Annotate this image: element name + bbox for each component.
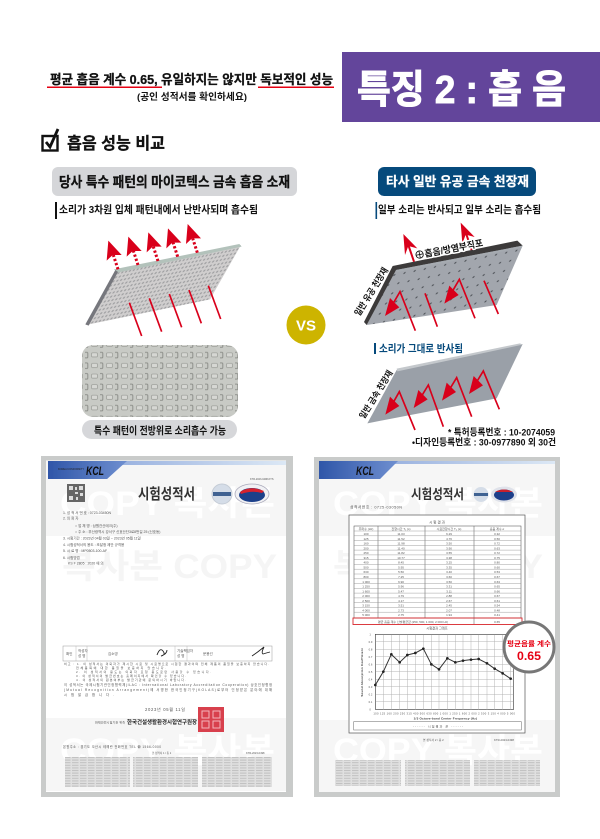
results table: 11.82: [397, 551, 405, 555]
results table: 4.17: [398, 599, 404, 603]
caption: competitor: 일부 소리는 반사되고 일부 소리는 흡수됨: [378, 203, 541, 216]
results table: [349, 515, 525, 733]
results table: 3.35: [446, 566, 452, 570]
results table: 4 000: [362, 608, 370, 612]
date and issuer: [95, 706, 197, 726]
heading pill: competitor: 타사 일반 유공 금속 천장재: [386, 174, 529, 189]
results table: 3.60: [446, 575, 452, 579]
results table: 시 험 결 과: [429, 520, 446, 524]
results table: 10.77: [397, 556, 405, 560]
results table: 200: [363, 546, 369, 550]
KCL header: KOREA CONFORMITY: [58, 468, 84, 471]
results table: 5 000: [362, 613, 370, 617]
footer strips: 본 성적서 2 / 총 2: [423, 738, 444, 742]
illustration: perforated plate: [352, 223, 523, 331]
KCL header: [319, 461, 555, 479]
KCL header: KCL: [86, 464, 104, 478]
signature table: 성 명: [78, 653, 85, 658]
results table: 1 600: [362, 589, 370, 593]
results table: 0.61: [494, 599, 500, 603]
results table: 3.11: [446, 589, 452, 593]
panel: competing perforated metal ceiling: [352, 167, 556, 448]
report number: 성적서번호 : 0725-03050N: [350, 504, 402, 510]
heading pill: our material: 당사 특수 패턴의 마이코텍스 금속 흡음 소재: [59, 174, 290, 190]
heading pill: competitor: [378, 167, 536, 196]
certificate title: 시험성적서: [138, 486, 195, 503]
results table: 6.29: [446, 532, 452, 536]
signature table: 김소영: [108, 651, 118, 656]
results table: 0.65: [494, 584, 500, 588]
accreditation logos: [212, 484, 269, 504]
dotted red arrows: escaping sound: [107, 224, 201, 269]
results table: 흡음 계수 α: [490, 526, 504, 531]
footer strips: [63, 744, 272, 787]
results table: 11.52: [397, 537, 405, 541]
results table: 3.50: [446, 580, 452, 584]
results table: 5.95: [398, 566, 404, 570]
notes: 이 성적서는 국제시험기관인정협력체(ILAC : International Laboratory Accreditation Cooperation) 상호인정협정: [64, 682, 272, 687]
certificate page 1: KTR-2023-0498-KTS: [250, 478, 274, 481]
signature table: [63, 646, 272, 661]
highlighted mean row: [353, 618, 522, 624]
VS badge: [286, 306, 326, 344]
watermark text: COPY 복사본: [60, 732, 275, 770]
results table: 5.50: [398, 570, 404, 574]
certificate details: ○ 업 체 명 : 삼원건산테크(주): [75, 523, 117, 528]
results table: 3.50: [446, 542, 452, 546]
watermark text: COPY 복사본: [60, 485, 275, 523]
caption: our material: 소리가 3차원 입체 패턴내에서 난반사되며 흡수됨: [59, 203, 258, 216]
certificate page 2: [314, 457, 560, 797]
highlighted mean row: 0.65: [494, 620, 500, 624]
rotated label: general perforated ceiling: 일반 유공 천장재: [352, 265, 390, 318]
red seal: [198, 707, 224, 732]
results table: 0.54: [494, 604, 500, 608]
QR code: [67, 484, 85, 502]
results table: 0.63: [494, 546, 500, 550]
banner: feature 2 sound absorption: [342, 52, 600, 122]
absorption line chart: 0.3: [369, 685, 373, 689]
results table: 시료잔향시간 T₂ (s): [437, 526, 461, 531]
results table: 3.40: [446, 570, 452, 574]
certificate details: 1. 성 적 서 번 호 : 0723-03450N: [63, 510, 111, 515]
results table: 7.25: [398, 575, 404, 579]
notes: 3. 이 성적서의 발급번호는 홈페이지에서 확인할 수 있습니다.: [76, 673, 186, 678]
certificate details: 5. 시 료 명 : MP0503-100-AF: [63, 548, 107, 553]
results table: 4.79: [398, 594, 404, 598]
notes: 비고 : 1. 이 성적서는 의뢰자가 제시한 시료 및 시료명으로 시험한 결과이며 전체 제품의 품질을 보증하지 않습니다.: [64, 661, 269, 666]
results table: 0.32: [494, 532, 500, 536]
accreditation logos: [474, 486, 517, 502]
results table: 3.90: [446, 546, 452, 550]
red arrows: fully reflected sound: [385, 371, 499, 430]
red arrows: sound passing through: [403, 223, 475, 262]
date and issuer: 한국건설생활환경시험연구원장: [127, 718, 197, 726]
results table: 3.31: [446, 584, 452, 588]
banner: feature 2 sound absorption: 특징 2 : 흡 음: [357, 69, 566, 112]
results table: 1 000: [362, 580, 370, 584]
watermark text: 복사본 COPY: [62, 548, 277, 586]
results table: 0.67: [494, 594, 500, 598]
results table: 11.98: [397, 542, 405, 546]
notes: 4. 이 성적서의 원본여부는 발급기관에 문의하시기 바랍니다.: [76, 677, 186, 682]
absorption line chart: 100 125 160 200 250 315 400 500 630 800 1 000 1 250 1 600 2 000 2 500 3 150 4 000 5 000: [373, 711, 516, 715]
red lines: incoming sound: [129, 286, 221, 336]
results table: 2.67: [446, 599, 452, 603]
certificate details: 6. 시험방법: [63, 555, 80, 560]
notes: (Mutual Recognition Arrangement)에 서명한 한국인정기구(KOLAS)로부터 인정받은 분야에 대해: [64, 687, 272, 692]
icon: checkbox: [42, 129, 58, 150]
results table: 3.51: [398, 604, 404, 608]
caption: reflected as-is: 소리가 그대로 반사됨: [379, 342, 463, 355]
results table: 11.03: [397, 532, 405, 536]
results table: 6.90: [398, 580, 404, 584]
certificate details: 3. 시험기간 : 2023년 04월 03일 ~ 2023년 05월 11일: [63, 536, 141, 540]
results table: 315: [363, 556, 369, 560]
results table: 160: [363, 542, 369, 546]
absorption line chart: 0.6: [369, 663, 373, 667]
absorption line chart: 1: [369, 633, 371, 637]
headline with red underlines: 평균 흡음 계수 0.65, 유일하지는 않지만 독보적인 성능: [50, 72, 333, 87]
watermark text: COPY 복사본: [333, 485, 543, 523]
results table: 2.73: [398, 608, 404, 612]
VS badge: VS: [296, 318, 316, 334]
callout: mean absorption coefficient 0.65: 평균음률 계수: [507, 639, 552, 648]
results table: 0.50: [494, 537, 500, 541]
panel: our micro-tex metal absorption material: [52, 167, 297, 439]
results table: 3.38: [446, 556, 452, 560]
KCL header: [48, 461, 286, 479]
results table: 2 500: [362, 599, 370, 603]
label: absorbing nonwoven: 흡음/방염부직포: [424, 237, 484, 259]
results table: 2 000: [362, 594, 370, 598]
certificate details: ○ 주 소 : 부산광역시 강서구 신호산단3로8번길 25 (신호동): [75, 529, 160, 534]
date and issuer: 2023년 05월 11일: [145, 706, 185, 713]
results table: 2.45: [446, 604, 452, 608]
results table: 0.72: [494, 551, 500, 555]
footer strips: 본 성적서 1 / 총 1: [152, 751, 172, 755]
results table: 3 150: [362, 604, 370, 608]
results table: 4.76: [446, 537, 452, 541]
results table: 11.40: [397, 546, 405, 550]
absorption line chart: 0.8: [369, 648, 373, 652]
absorption line chart: 0.4: [369, 678, 373, 682]
signature table: 작성자: [78, 648, 88, 653]
illustration: textured plate with absorbed sound: [85, 224, 242, 336]
absorption line chart: 0.2: [369, 693, 373, 697]
results table: 0.66: [494, 589, 500, 593]
callout: mean absorption coefficient 0.65: 0.65: [517, 649, 541, 663]
results table: 시험결과 그래프: [426, 626, 448, 630]
absorption line chart: 0.7: [369, 655, 373, 659]
results table: 3.25: [446, 561, 452, 565]
results table: 0.63: [494, 580, 500, 584]
certificate details: KS F 2805 : 2020 에 의: [68, 560, 104, 566]
caption pill: pattern: [82, 420, 237, 439]
results table: 0.53: [494, 570, 500, 574]
results table: 125: [363, 537, 369, 541]
notes: [64, 661, 272, 697]
notes: 시험발급합니다.: [64, 692, 114, 697]
caption pill: pattern: 특수 패턴이 전방위로 소리흡수 가능: [94, 424, 226, 437]
results table: 0.48: [494, 608, 500, 612]
results table: 250: [363, 551, 369, 555]
section heading with checkbox icon: 흡음 성능 비교: [67, 134, 165, 153]
results table: 0.75: [494, 556, 500, 560]
certificate details: 4. 시험성적서의 용도 : 조달청 제안 규격용: [63, 542, 125, 547]
footer strips: [335, 738, 540, 786]
absorption line chart: Sound Absorption Coefficient: [360, 648, 364, 697]
KCL header: KCL: [356, 464, 374, 478]
results table: 100: [363, 532, 369, 536]
footer strips: 본원주소 : 경기도 오산시 테헤란 전화번호 TEL ☎ 1566-0000: [63, 744, 161, 749]
footer strips: KTR-2023-0498: [494, 738, 514, 742]
absorption line chart: 0.5: [369, 670, 373, 674]
rotated label: general metal ceiling: 일반 금속 천장재: [356, 368, 395, 420]
certificate page 1: [41, 456, 293, 797]
watermark text: [333, 485, 543, 770]
results table: 2.88: [446, 594, 452, 598]
watermark text: COPY 복사본: [333, 732, 543, 770]
pattern close-up photo: [82, 345, 238, 417]
results table: 0.67: [494, 575, 500, 579]
footer strips: KTR-2023-0498: [246, 751, 265, 755]
watermark text: [60, 485, 277, 770]
absorption line chart: 1/3 Octave-band Center Frequency (Hz): [414, 716, 477, 720]
results table: 8.45: [398, 561, 404, 565]
watermark text: 복사본 COPY: [333, 548, 543, 586]
callout: mean absorption coefficient 0.65: [504, 622, 554, 672]
section heading with checkbox icon: [42, 129, 165, 153]
results table: 잔향시간 T₁ (s): [391, 526, 411, 531]
results table: 주파수 (Hz): [359, 526, 373, 531]
results table: 0.80: [494, 561, 500, 565]
certificate details: [63, 510, 160, 566]
signature table: 기술책임자: [177, 648, 194, 653]
results table: 0.41: [494, 613, 500, 617]
results table: 0.60: [494, 566, 500, 570]
results table: 2.07: [446, 608, 452, 612]
notes: 2. 이 성적서의 용도는 의뢰자 요청 용도로만 사용할 수 있습니다.: [76, 669, 211, 674]
patent numbers: [412, 426, 556, 448]
date and issuer: 화재안전시험기관 위촉: [95, 720, 125, 724]
results table: 5.96: [398, 584, 404, 588]
results table: 0.72: [494, 542, 500, 546]
illustration: plain metal plate: [356, 343, 523, 430]
patent numbers: •디자인등록번호 : 30-0977890 외 30건: [412, 436, 556, 448]
results table: 1 250: [362, 584, 370, 588]
red arrows: reflected sound: [385, 279, 498, 331]
signature table: 확인: [66, 651, 72, 656]
absorption line chart: 0.1: [369, 700, 373, 704]
results table: 3.55: [446, 551, 452, 555]
results table: 5.47: [398, 589, 404, 593]
heading pill: our material: [52, 167, 297, 196]
patent numbers: * 특허등록번호 : 10-2074059: [448, 426, 555, 438]
notes: 전체품목에 대한 품질을 보증하지 않습니다.: [76, 665, 166, 670]
results table: 630: [363, 570, 369, 574]
signature table: 성 명: [177, 653, 184, 658]
subtitle: (공인 성적서를 확인하세요): [137, 91, 247, 103]
absorption line chart: ------ 시험결과 끝 ------: [413, 723, 463, 728]
results table: 400: [363, 561, 369, 565]
absorption line chart: [354, 633, 521, 730]
signature table: 문용선: [203, 651, 213, 656]
results table: 800: [363, 575, 369, 579]
absorption line chart: 0.9: [369, 640, 373, 644]
certificate title: 시험성적서: [411, 487, 464, 502]
results table: 2.75: [398, 613, 404, 617]
certificate details: 2. 의 뢰 자: [63, 516, 79, 520]
absorption line chart: 0: [369, 707, 371, 711]
results table: 1.94: [446, 613, 452, 617]
highlighted mean row: 평균 흡음 계수 산술평균값 (250, 500, 1 000, 2 000 Hz): [378, 619, 448, 624]
results table: 500: [363, 566, 369, 570]
